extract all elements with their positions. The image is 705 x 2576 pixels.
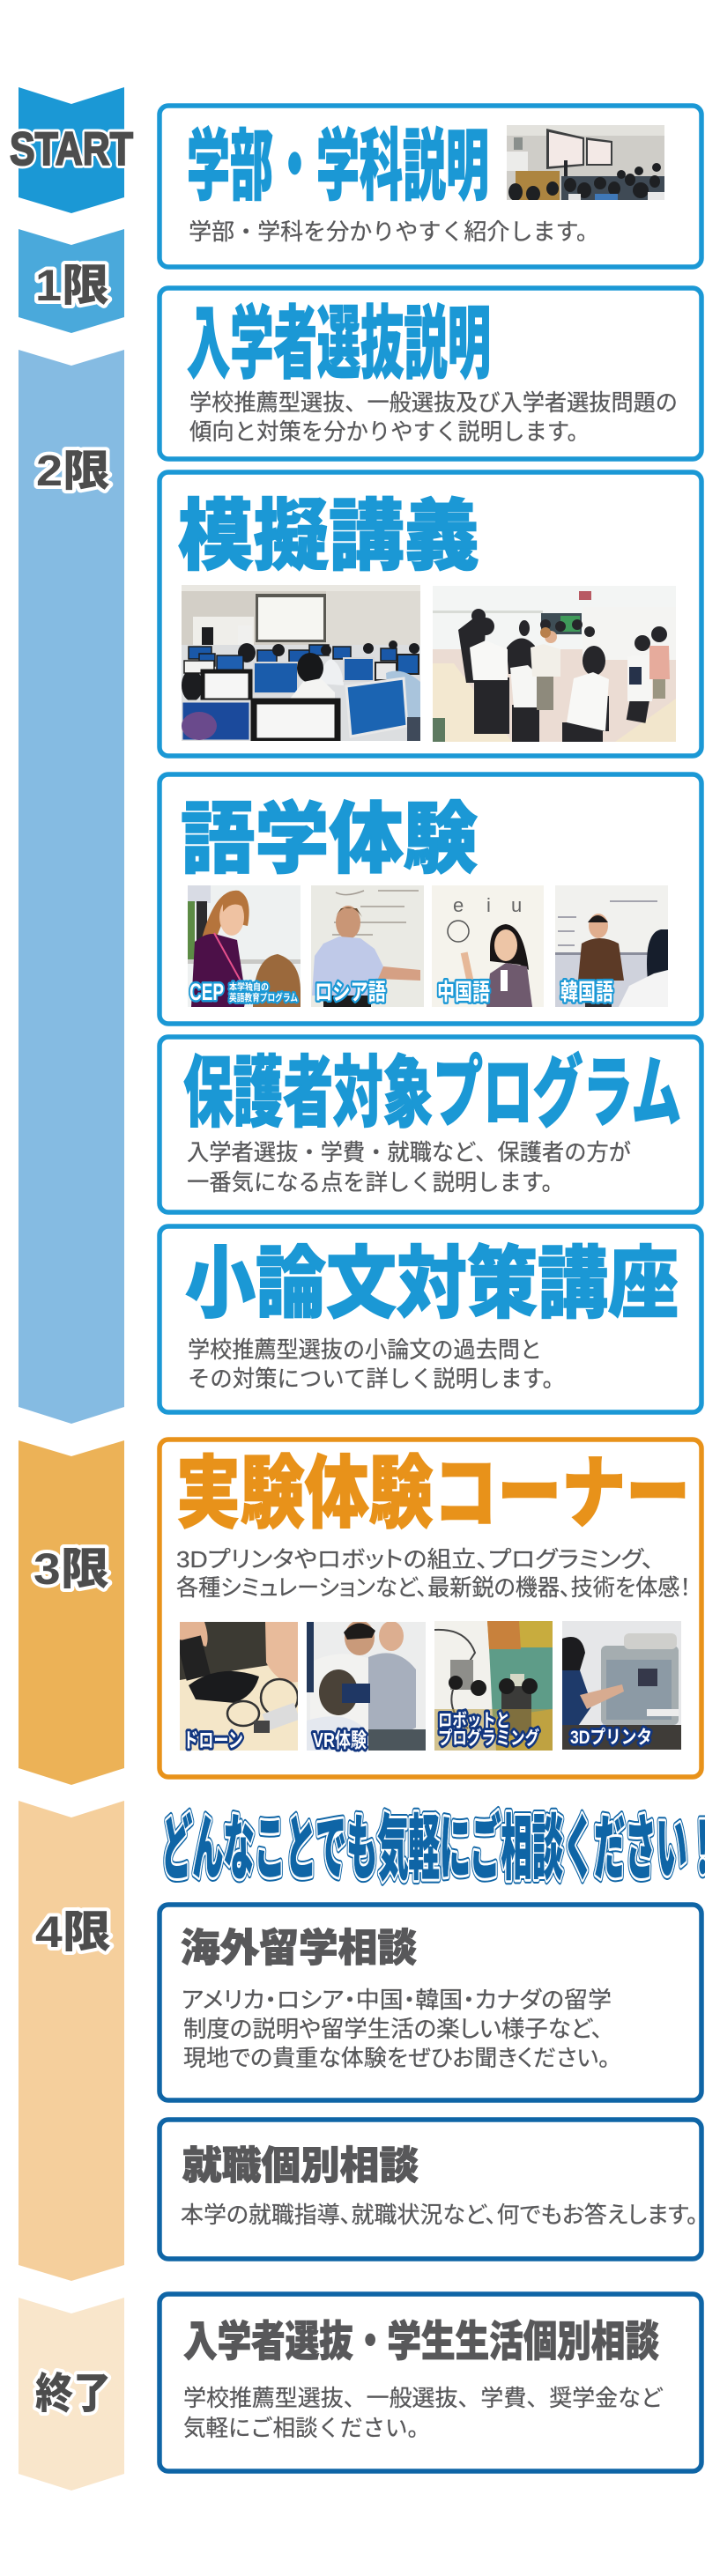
panel: 入学者選抜・学生生活個別相談: 気軽にご相談ください。: [183, 2415, 430, 2441]
photo: 韓国語: 韓国語: [560, 979, 613, 1005]
photo: lecture hall: [507, 125, 664, 200]
photo: 韓国語: [555, 885, 668, 1007]
step: START: [10, 87, 133, 213]
panel: 語学体験: 語学体験: [181, 796, 478, 883]
photo: CEP: [188, 885, 301, 1007]
panel: 語学体験: [160, 774, 701, 1024]
description: 学校推薦型選抜、一般選抜及び入学者選抜問題の: [189, 389, 678, 416]
photo: ロボットとプログラミング: [434, 1621, 553, 1751]
step: 終了: [19, 2298, 124, 2491]
photo: 中国語: i: [486, 894, 491, 916]
panel: 保護者対象プログラム: 一番気になる点を詳しく説明します。: [187, 1169, 564, 1195]
photo: 中国語: u: [511, 894, 522, 916]
step: START: START: [10, 123, 133, 175]
panel: 海外留学相談: 制度の説明や留学生活の楽しい様子など、: [183, 2016, 603, 2042]
photo: CEP: CEP: [189, 979, 224, 1005]
photo: ドローン: [177, 1622, 300, 1751]
panel: 保護者対象プログラム: [160, 1037, 701, 1212]
panel: 模擬講義: [160, 472, 701, 756]
panel: 海外留学相談: 海外留学相談: [181, 1927, 417, 1970]
photo: 中国語: e: [453, 894, 464, 916]
photo: 中国語: 中国語: [437, 979, 490, 1005]
step: 4限: [19, 1801, 124, 2281]
panel: 模擬講義: 模擬講義: [178, 492, 479, 580]
step: 2限: 2限: [36, 448, 110, 495]
panel: 海外留学相談: [160, 1905, 701, 2100]
panel: 入学者選抜説明: 傾向と対策を分かりやすく説明します。: [189, 418, 590, 445]
step: 終了: 終了: [35, 2371, 111, 2417]
step: 3限: 3限: [33, 1544, 109, 1594]
panel: 実験体験コーナー: 各種シミュレーションなど、最新鋭の機器、技術を体感！: [176, 1574, 691, 1601]
step: START: START: [10, 123, 133, 175]
panel: 入学者選抜説明: [160, 288, 701, 459]
step: 3限: [19, 1440, 124, 1785]
photo: 3Dプリンタ: 3Dプリンタ: [570, 1728, 652, 1748]
description: 入学者選抜・学費・就職など、保護者の方が: [187, 1139, 631, 1166]
panel: 海外留学相談: 現地での貴重な体験をぜひお聞きください。: [183, 2045, 610, 2071]
photo: VR体験: VR体験: [313, 1728, 367, 1751]
panel: 入学者選抜・学生生活個別相談: [160, 2294, 701, 2471]
photo: 3Dプリンタ: [562, 1621, 681, 1750]
photo: 中国語: [432, 885, 544, 1007]
panel: 小論文対策講座: [160, 1226, 701, 1412]
step: 2限: [19, 350, 124, 1424]
step: 4限: 4限: [35, 1907, 111, 1957]
panel: 就職個別相談: 就職個別相談: [182, 2144, 419, 2187]
photo: computer room: [182, 585, 420, 741]
description: 3Dプリンタやロボットの組立、プログラミング、: [176, 1546, 654, 1573]
panel: 小論文対策講座: その対策について詳しく説明します。: [188, 1366, 565, 1392]
panel: 学部・学科説明: [160, 106, 701, 267]
photo: group activity: [433, 586, 676, 742]
photo: VR体験: [307, 1620, 426, 1751]
photo: ロボットとプログラミング: プログラミング: [438, 1728, 539, 1749]
photo: ドローン: ドローン: [183, 1728, 243, 1751]
photo: CEP: 本学独自の: [229, 981, 269, 993]
photo: ロシア語: ロシア語: [315, 979, 386, 1005]
photo: ロボットとプログラミング: ロボットと: [438, 1711, 510, 1731]
photo: ロシア語: [311, 885, 424, 1007]
step: 1限: [19, 229, 124, 333]
description: 本学の就職指導、就職状況など、何でもお答えします。: [181, 2202, 698, 2228]
description: アメリカ・ロシア・中国・韓国・カナダの留学: [182, 1987, 612, 2013]
description: 学校推薦型選抜、一般選抜、学費、奨学金など: [183, 2385, 664, 2411]
panel: 就職個別相談: [160, 2120, 701, 2259]
description: 学部・学科を分かりやすく紹介します。: [189, 218, 599, 245]
photo: CEP: 英語教育プログラム: [229, 991, 298, 1003]
panel: 実験体験コーナー: [160, 1440, 701, 1777]
step: 1限: 1限: [35, 261, 109, 310]
description: 学校推薦型選抜の小論文の過去問と: [188, 1336, 542, 1363]
